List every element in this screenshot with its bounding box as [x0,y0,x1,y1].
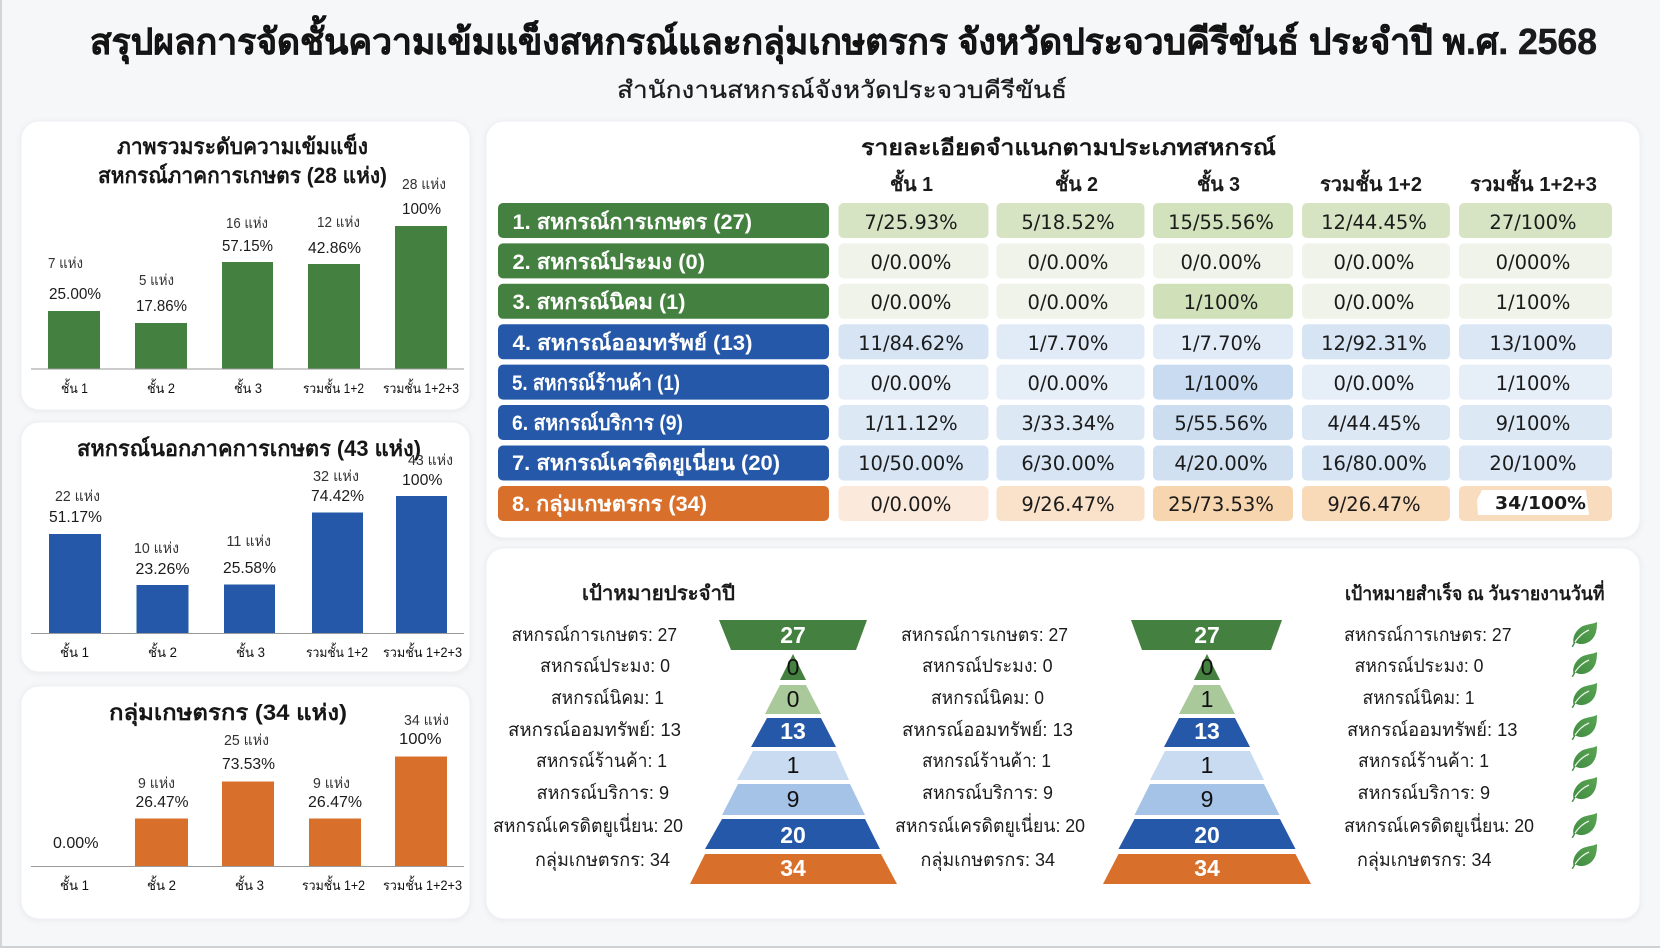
row 2: 2. สหกรณ์ประมง (0) [512,250,705,274]
list: achieved target right: สหกรณ์ประมง: 0 [1354,655,1484,676]
row 2: 0/0.00% [1334,251,1414,274]
list: annual target middle: สหกรณ์ประมง: 0 [922,655,1052,676]
pyramid: annual target: 0 [787,686,799,712]
heading: annual target: เป้าหมายประจำปี [582,582,735,605]
heading: overview: ภาพรวมระดับความเข้มแข็ง [117,132,368,159]
bar: รวมชั้น 1+2: 26.47% [308,794,362,811]
bar: รวมชั้น 1+2+3 [383,712,462,893]
row 8: 25/73.53% [1168,493,1274,516]
list: annual target left: สหกรณ์นิคม: 1 [551,687,664,708]
row 8: 9/26.47% [1021,493,1115,516]
list: annual target left: สหกรณ์บริการ: 9 [536,782,669,803]
list: achieved target right: สหกรณ์เครดิตยูเนี่ยน: 20 [1344,813,1534,837]
list: annual target left [493,624,683,872]
row 3: 0/0.00% [1028,291,1108,314]
row 7: 16/80.00% [1321,452,1427,475]
row 3: 1/100% [1496,291,1570,314]
bar: รวมชั้น 1+2+3 [383,452,462,660]
row 1: 5/18.52% [1021,211,1115,234]
row 5: 0/0.00% [871,372,951,395]
bar: ชั้น 3: 11 แห่ง [226,533,271,550]
row 8: 0/0.00% [871,493,951,516]
heading: table: รายละเอียดจำแนกตามประเภทสหกรณ์ [861,135,1276,160]
row 3: 0/0.00% [871,291,951,314]
row 1: 15/55.56% [1168,211,1274,234]
row 1: 1. สหกรณ์การเกษตร (27) [512,210,752,234]
bar: ชั้น 1: 22 แห่ง [55,488,100,505]
list: annual target middle: กลุ่มเกษตรกร: 34 [920,849,1055,872]
list: annual target left: สหกรณ์ออมทรัพย์: 13 [508,719,681,740]
row 7: 7. สหกรณ์เครดิตยูเนี่ยน (20) [512,447,780,477]
bar: ชั้น 2: ชั้น 2 [147,875,176,893]
bar: ชั้น 3 [223,533,276,660]
row 4: 11/84.62% [858,332,964,355]
column headers: ชั้น 1 [890,169,933,196]
pyramid: annual target [690,620,897,884]
list: achieved target right: สหกรณ์ออมทรัพย์: 13 [1347,719,1518,740]
bar: ชั้น 1: 25.00% [49,286,101,303]
row 5: 5. สหกรณ์ร้านค้า (1) [512,371,680,395]
bar: ชั้น 2 [135,272,187,396]
row 7: 4/20.00% [1174,452,1268,475]
bar: รวมชั้น 1+2: 42.86% [308,240,361,257]
bar: รวมชั้น 1+2 [303,214,364,396]
column headers: ชั้น 3 [1197,169,1240,196]
pyramid: annual target: 9 [787,786,799,812]
list: annual target left: สหกรณ์การเกษตร: 27 [512,624,677,645]
bar: รวมชั้น 1+2: 9 แห่ง [313,775,350,792]
row 6: 6. สหกรณ์บริการ (9) [512,411,683,435]
row 1: 7/25.93% [864,211,958,234]
pyramid: achieved target: 9 [1201,786,1213,812]
bar: ชั้น 1 [48,255,101,396]
row 8: 8. กลุ่มเกษตรกร (34) [512,493,707,518]
bar: ชั้น 3: ชั้น 3 [235,875,264,893]
bar: ชั้น 2: 23.26% [136,561,190,578]
heading: non-agricultural: สหกรณ์นอกภาคการเกษตร (43 แห่ง) [77,436,421,461]
column headers: รวมชั้น 1+2 [1320,169,1422,196]
bar: รวมชั้น 1+2 [306,468,368,660]
bar: ชั้น 1: ชั้น 1 [60,875,89,893]
pyramid: annual target: 13 [780,718,806,744]
column headers [890,169,1597,196]
bar: ชั้น 3 [222,215,273,396]
row 3: 0/0.00% [1334,291,1414,314]
heading: achieved target: เป้าหมายสำเร็จ ณ วันรายงานวันที่ [1345,580,1604,605]
subtitle: สำนักงานสหกรณ์จังหวัดประจวบคีรีขันธ์ [617,76,1067,104]
pyramid: achieved target: 20 [1194,822,1220,848]
bar: รวมชั้น 1+2+3: 100% [402,472,442,489]
list: annual target middle: สหกรณ์เครดิตยูเนี่ยน: 20 [895,813,1085,837]
pyramid: annual target: 1 [787,752,799,778]
bar: ชั้น 2: ชั้น 2 [148,642,177,660]
pyramid: achieved target: 0 [1201,654,1213,680]
row 7: 10/50.00% [858,452,964,475]
bar: ชั้น 2: 10 แห่ง [134,540,179,557]
pyramid: achieved target [1103,620,1311,884]
bar: ชั้น 2: 9 แห่ง [138,775,175,792]
row 6: 4/44.45% [1327,412,1421,435]
bar: รวมชั้น 1+2: รวมชั้น 1+2 [306,642,368,660]
row 4: 1/7.70% [1028,332,1108,355]
bar: ชั้น 3: 73.53% [222,756,275,773]
row 2: 0/0.00% [1181,251,1261,274]
row 3: 3. สหกรณ์นิคม (1) [512,290,686,314]
bar: รวมชั้น 1+2+3: 100% [399,731,442,748]
list: achieved target right [1344,624,1534,872]
bar: ชั้น 1: 51.17% [49,509,102,526]
pyramid: achieved target: 27 [1194,622,1220,648]
row 5: 0/0.00% [1028,372,1108,395]
bar: รวมชั้น 1+2 [302,775,365,893]
pyramid: annual target: 20 [780,822,806,848]
row 6: 9/100% [1496,412,1570,435]
row 5: 1/100% [1496,372,1570,395]
row 4: 4. สหกรณ์ออมทรัพย์ (13) [512,331,752,355]
heading: farmer groups: กลุ่มเกษตรกร (34 แห่ง) [109,700,347,727]
pyramid: achieved target: 13 [1194,718,1220,744]
list: annual target middle: สหกรณ์ร้านค้า: 1 [922,750,1051,771]
bar: รวมชั้น 1+2: รวมชั้น 1+2 [303,378,364,396]
row 5 [498,365,1612,400]
bar: ชั้น 3: 25 แห่ง [224,732,269,749]
bar: ชั้น 3: 16 แห่ง [226,215,268,232]
row 3: 1/100% [1184,291,1258,314]
column headers: ชั้น 2 [1055,169,1098,196]
bar: รวมชั้น 1+2+3: 34 แห่ง [404,712,449,729]
bar: รวมชั้น 1+2+3: รวมชั้น 1+2+3 [383,875,462,893]
bar: ชั้น 1: 7 แห่ง [48,255,83,272]
row 4 [498,324,1612,359]
panel: non-agricultural cooperatives chart [21,422,470,672]
pyramid: achieved target: 34 [1194,855,1220,881]
bar: รวมชั้น 1+2+3: 100% [402,201,441,218]
row 7: 6/30.00% [1021,452,1115,475]
list: annual target middle: สหกรณ์ออมทรัพย์: 13 [902,719,1073,740]
column headers: รวมชั้น 1+2+3 [1470,169,1597,196]
heading: overview [98,132,387,188]
row 2: 0/0.00% [1028,251,1108,274]
list: annual target left: กลุ่มเกษตรกร: 34 [535,849,670,872]
row 6 [498,405,1612,440]
bar: ชั้น 3 [222,732,275,893]
list: achieved target right: สหกรณ์นิคม: 1 [1362,687,1474,708]
row 4: 12/92.31% [1321,332,1427,355]
bar: ชั้น 2: 17.86% [136,298,187,315]
row 8: 34/100% [1495,493,1586,514]
pyramid: achieved target: 1 [1201,752,1213,778]
row 7 [498,446,1612,480]
bar: ชั้น 3: 25.58% [223,560,276,577]
bar: ชั้น 3: 57.15% [222,238,273,255]
bar: ชั้น 2 [134,540,190,660]
bar: รวมชั้น 1+2+3: รวมชั้น 1+2+3 [383,642,462,660]
list: achieved target right: สหกรณ์การเกษตร: 27 [1344,624,1512,645]
bar: ชั้น 3: ชั้น 3 [234,378,262,396]
bar: ชั้น 1: 0.00% [53,835,98,852]
row 1 [498,203,1612,238]
list: annual target middle: สหกรณ์การเกษตร: 27 [901,624,1068,645]
row 6: 1/11.12% [864,412,958,435]
bar: รวมชั้น 1+2+3: รวมชั้น 1+2+3 [383,378,459,396]
row 6: 5/55.56% [1174,412,1268,435]
row 1: 27/100% [1489,211,1577,234]
list: annual target middle [895,624,1085,872]
row 2: 0/000% [1496,251,1570,274]
list: achieved target right: สหกรณ์บริการ: 9 [1358,782,1490,803]
bar: ชั้น 2: 26.47% [136,794,188,811]
pyramid: annual target: 27 [780,622,806,648]
row 5: 1/100% [1184,372,1258,395]
row 7: 20/100% [1489,452,1577,475]
icons: green leaves [1572,622,1597,869]
list: annual target middle: สหกรณ์นิคม: 0 [931,687,1044,708]
bar: ชั้น 2 [135,775,188,893]
bar: รวมชั้น 1+2+3 [383,176,459,396]
bar: ชั้น 1 [53,835,98,893]
bar: รวมชั้น 1+2: 74.42% [311,488,364,505]
pyramid: achieved target: 1 [1201,686,1213,712]
list: annual target left: สหกรณ์ร้านค้า: 1 [536,750,667,771]
heading: overview: สหกรณ์ภาคการเกษตร (28 แห่ง) [98,163,387,188]
row 5: 0/0.00% [1334,372,1414,395]
list: annual target left: สหกรณ์เครดิตยูเนี่ยน: 20 [493,813,683,837]
bar: ชั้น 2: 5 แห่ง [139,272,174,289]
bar: ชั้น 1: ชั้น 1 [61,378,88,396]
row 2: 0/0.00% [871,251,951,274]
panel: agricultural cooperatives overview chart [21,121,470,410]
title: สรุปผลการจัดชั้นความเข้มแข็งสหกรณ์และกลุ่มเกษตรกร จังหวัดประจวบคีรีขันธ์ ประจำปี พ.ศ. 2568 [90,15,1597,65]
pyramid: annual target: 0 [787,654,799,680]
panel: targets and pyramids [486,548,1640,919]
bar: รวมชั้น 1+2+3: 43 แห่ง [408,452,453,469]
bar: รวมชั้น 1+2: รวมชั้น 1+2 [302,875,365,893]
bar: รวมชั้น 1+2: 12 แห่ง [317,214,360,231]
bar: ชั้น 3: ชั้น 3 [236,642,265,660]
bar: รวมชั้น 1+2+3: 28 แห่ง [402,176,446,193]
row 6: 3/33.34% [1021,412,1115,435]
list: annual target left: สหกรณ์ประมง: 0 [540,655,670,676]
row 3 [498,284,1612,319]
row 4: 13/100% [1489,332,1577,355]
list: annual target middle: สหกรณ์บริการ: 9 [922,782,1053,803]
row 1: 12/44.45% [1321,211,1427,234]
pyramid: annual target: 34 [780,855,806,881]
bar: ชั้น 2: ชั้น 2 [147,378,175,396]
bar: รวมชั้น 1+2: 32 แห่ง [313,468,359,485]
row 2 [498,243,1612,278]
list: achieved target right: กลุ่มเกษตรกร: 34 [1357,849,1492,872]
bar: ชั้น 1: ชั้น 1 [60,642,89,660]
panel: farmer groups chart [21,686,470,919]
bar: ชั้น 1 [49,488,102,660]
list: achieved target right: สหกรณ์ร้านค้า: 1 [1358,750,1489,771]
row 8 [498,486,1612,521]
row 8: 9/26.47% [1327,493,1421,516]
panel: detail table [486,121,1640,538]
row 4: 1/7.70% [1181,332,1261,355]
